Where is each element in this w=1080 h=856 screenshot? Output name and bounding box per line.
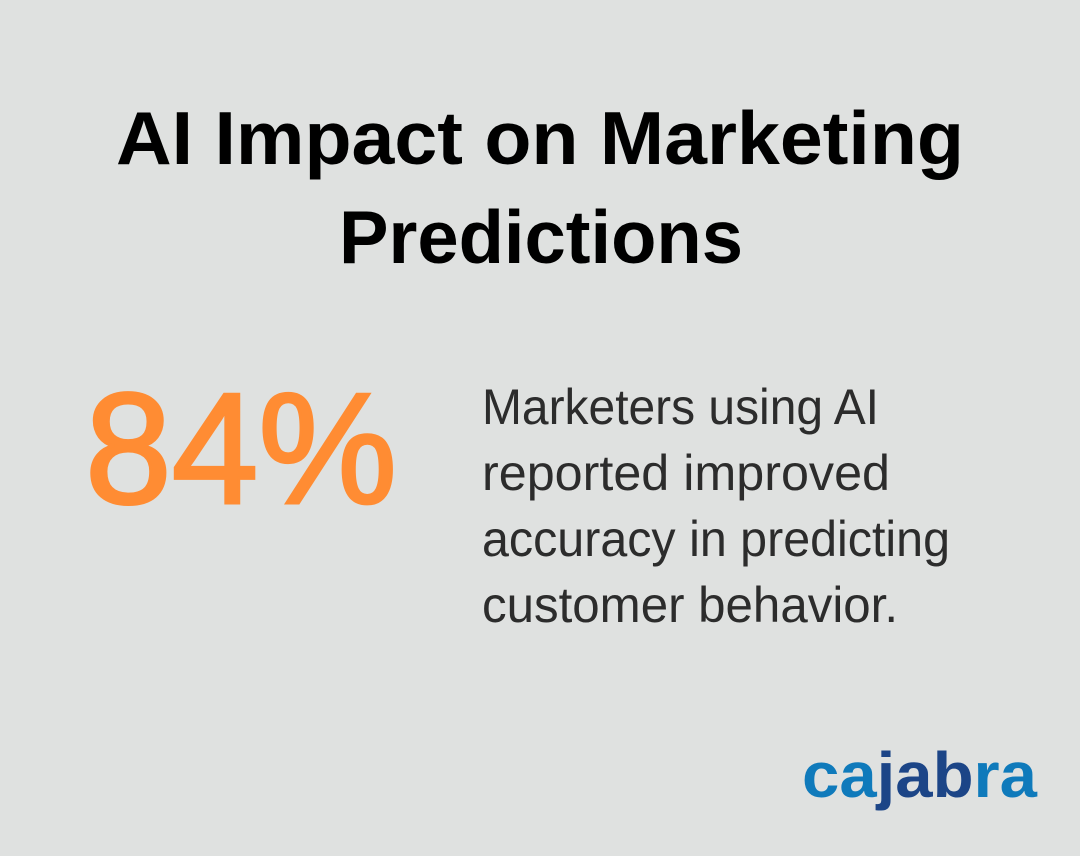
logo: cajabra: cajabra (802, 739, 1037, 811)
description text: customer behavior. (482, 577, 898, 633)
title: AI Impact on Marketing (116, 96, 964, 180)
description text: reported improved (482, 445, 890, 501)
title: Predictions (339, 195, 743, 279)
title (116, 96, 964, 279)
statistic: 84%: 84% (85, 361, 397, 537)
description text (482, 379, 950, 633)
description text: Marketers using AI (482, 379, 879, 435)
description text: accuracy in predicting (482, 511, 950, 567)
